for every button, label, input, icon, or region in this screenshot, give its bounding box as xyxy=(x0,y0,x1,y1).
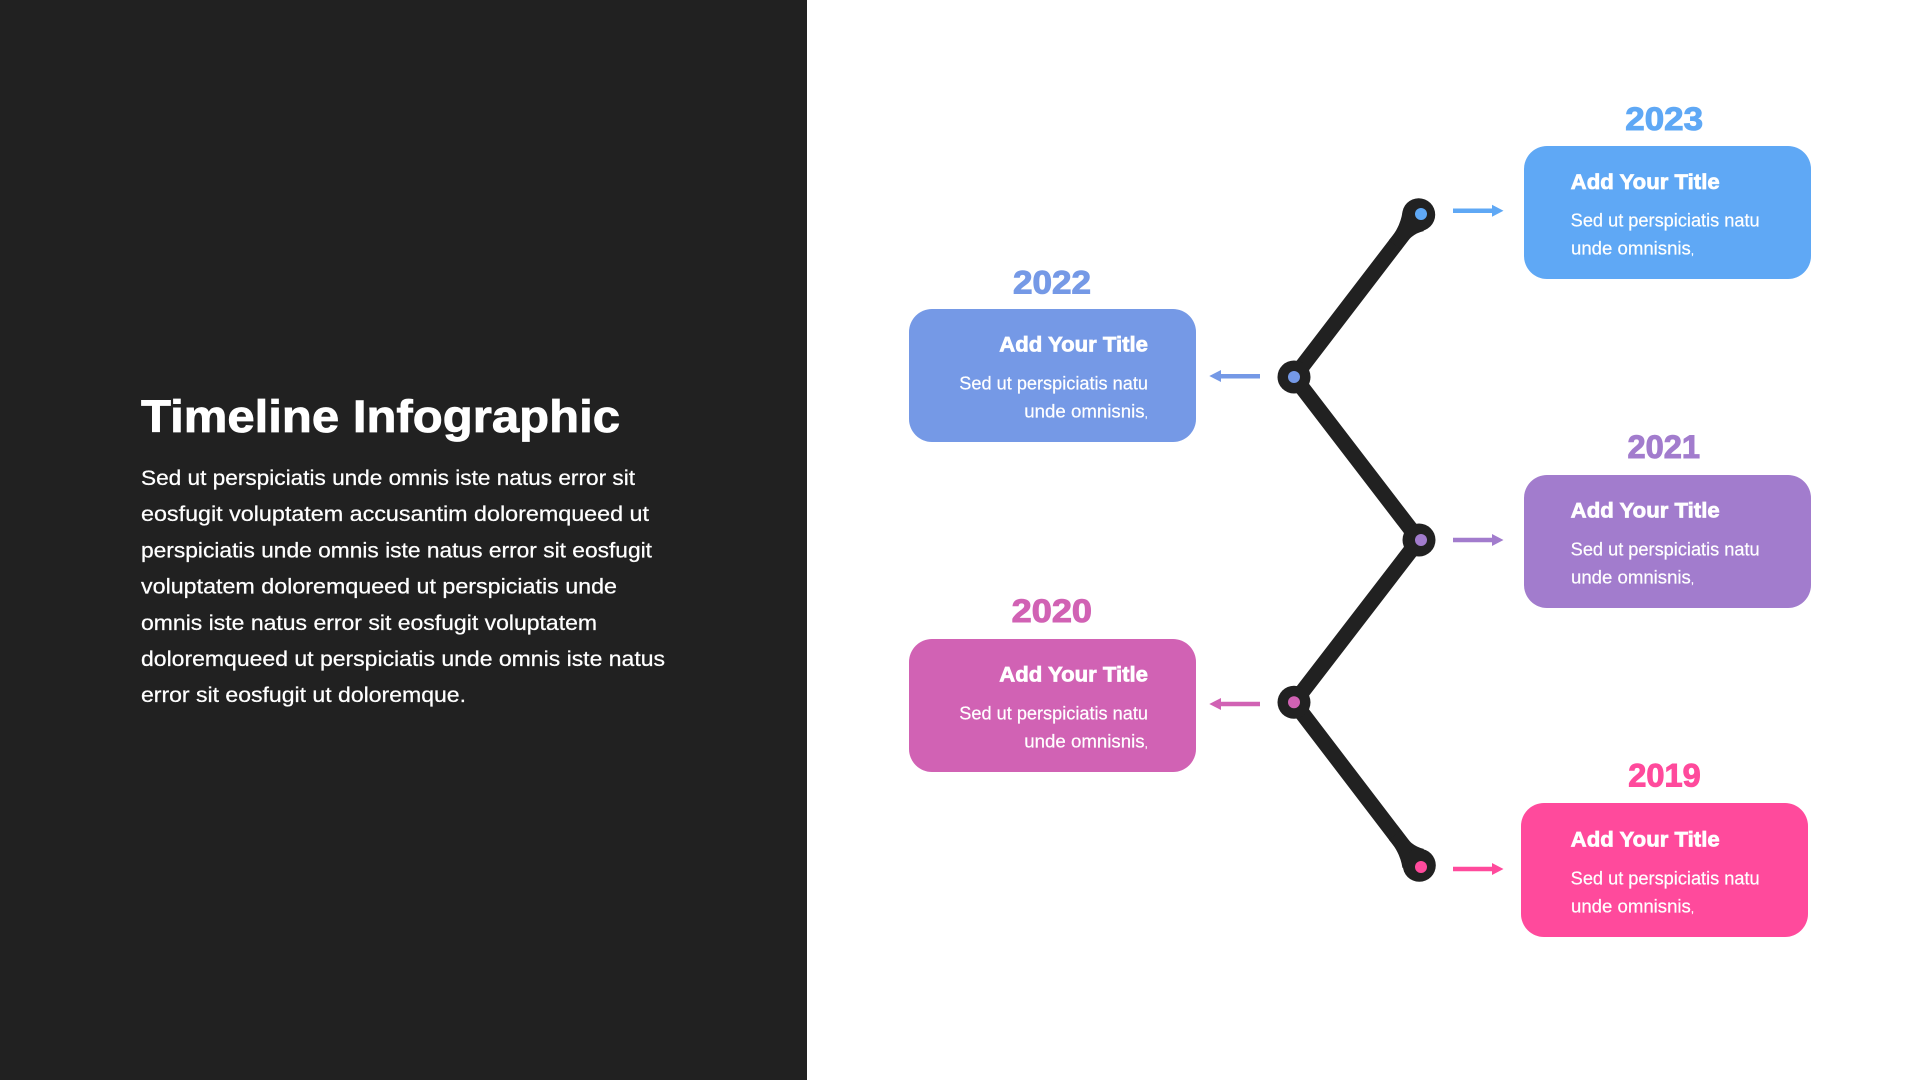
year: 2020: 2020 xyxy=(1012,593,1092,629)
panel: 2023 card xyxy=(1524,101,1811,279)
year: 2022: 2022 xyxy=(1013,264,1091,300)
card background: 2023 xyxy=(1524,146,1811,279)
card body: 2021 xyxy=(1571,540,1760,588)
text block: intro paragraph: Sed ut perspiciatis unde omnis iste natus error sit xyxy=(141,466,635,490)
year: 2023: 2023 xyxy=(1625,101,1703,137)
arrow: to 2023 xyxy=(1453,205,1504,217)
card body: 2020 xyxy=(959,703,1148,751)
card title: 2022: Add Your Title xyxy=(999,334,1148,357)
card title: 2020: Add Your Title xyxy=(999,664,1148,687)
card background: 2019 xyxy=(1521,803,1808,937)
card body: 2020: unde omnisnis , xyxy=(1024,731,1148,751)
card title: 2021: Add Your Title xyxy=(1571,500,1720,523)
node: 2020 xyxy=(1278,686,1310,719)
card background: 2020 xyxy=(909,639,1196,772)
card title: 2023: Add Your Title xyxy=(1571,171,1720,194)
text block: intro paragraph: doloremqueed ut perspiciatis unde omnis iste natus xyxy=(141,647,665,671)
card body: 2022 xyxy=(959,373,1148,421)
card body: 2021: Sed ut perspiciatis natu xyxy=(1571,540,1760,560)
node: 2021 xyxy=(1402,524,1436,556)
node: 2019 xyxy=(1403,849,1436,882)
text block: intro paragraph: omnis iste natus error sit eosfugit voluptatem xyxy=(141,611,597,635)
text block: intro paragraph xyxy=(141,466,665,707)
arrow: to 2020 xyxy=(1209,698,1260,710)
text block: intro paragraph: error sit eosfugit ut doloremque. xyxy=(141,683,466,707)
panel: 2020 card xyxy=(909,593,1196,772)
card title: 2019: Add Your Title xyxy=(1571,829,1720,852)
arrow: to 2022 xyxy=(1209,370,1260,382)
card body: 2022: unde omnisnis , xyxy=(1024,401,1148,421)
card body: 2023 xyxy=(1571,210,1760,258)
text block: intro paragraph: eosfugit voluptatem accusantim doloremqueed ut xyxy=(141,502,649,526)
card body: 2023: unde omnisnis , xyxy=(1571,238,1694,258)
panel: 2021 card xyxy=(1524,429,1811,608)
card body: 2019 xyxy=(1571,868,1760,916)
timeline zigzag connector xyxy=(1294,212,1424,868)
arrow: to 2019 xyxy=(1453,863,1504,875)
panel: 2019 card xyxy=(1521,758,1808,937)
card body: 2023: Sed ut perspiciatis natu xyxy=(1571,210,1760,230)
panel: dark left background xyxy=(0,0,807,1080)
card body: 2019: Sed ut perspiciatis natu xyxy=(1571,868,1760,888)
card body: 2022: Sed ut perspiciatis natu xyxy=(959,373,1148,393)
title: Timeline Infographic xyxy=(141,391,620,442)
arrow: to 2021 xyxy=(1453,534,1504,546)
card body: 2021: unde omnisnis , xyxy=(1571,568,1694,588)
card body: 2020: Sed ut perspiciatis natu xyxy=(959,703,1148,723)
panel: 2022 card xyxy=(909,264,1196,442)
year: 2021: 2021 xyxy=(1628,429,1700,465)
node: 2022 xyxy=(1278,360,1310,394)
year: 2019: 2019 xyxy=(1628,758,1701,794)
card body: 2019: unde omnisnis , xyxy=(1571,896,1694,916)
node: 2023 xyxy=(1402,198,1435,231)
card background: 2021 xyxy=(1524,475,1811,608)
card background: 2022 xyxy=(909,309,1196,442)
text block: intro paragraph: voluptatem doloremqueed ut perspiciatis unde xyxy=(141,574,617,598)
text block: intro paragraph: perspiciatis unde omnis iste natus error sit eosfugit xyxy=(141,538,652,562)
